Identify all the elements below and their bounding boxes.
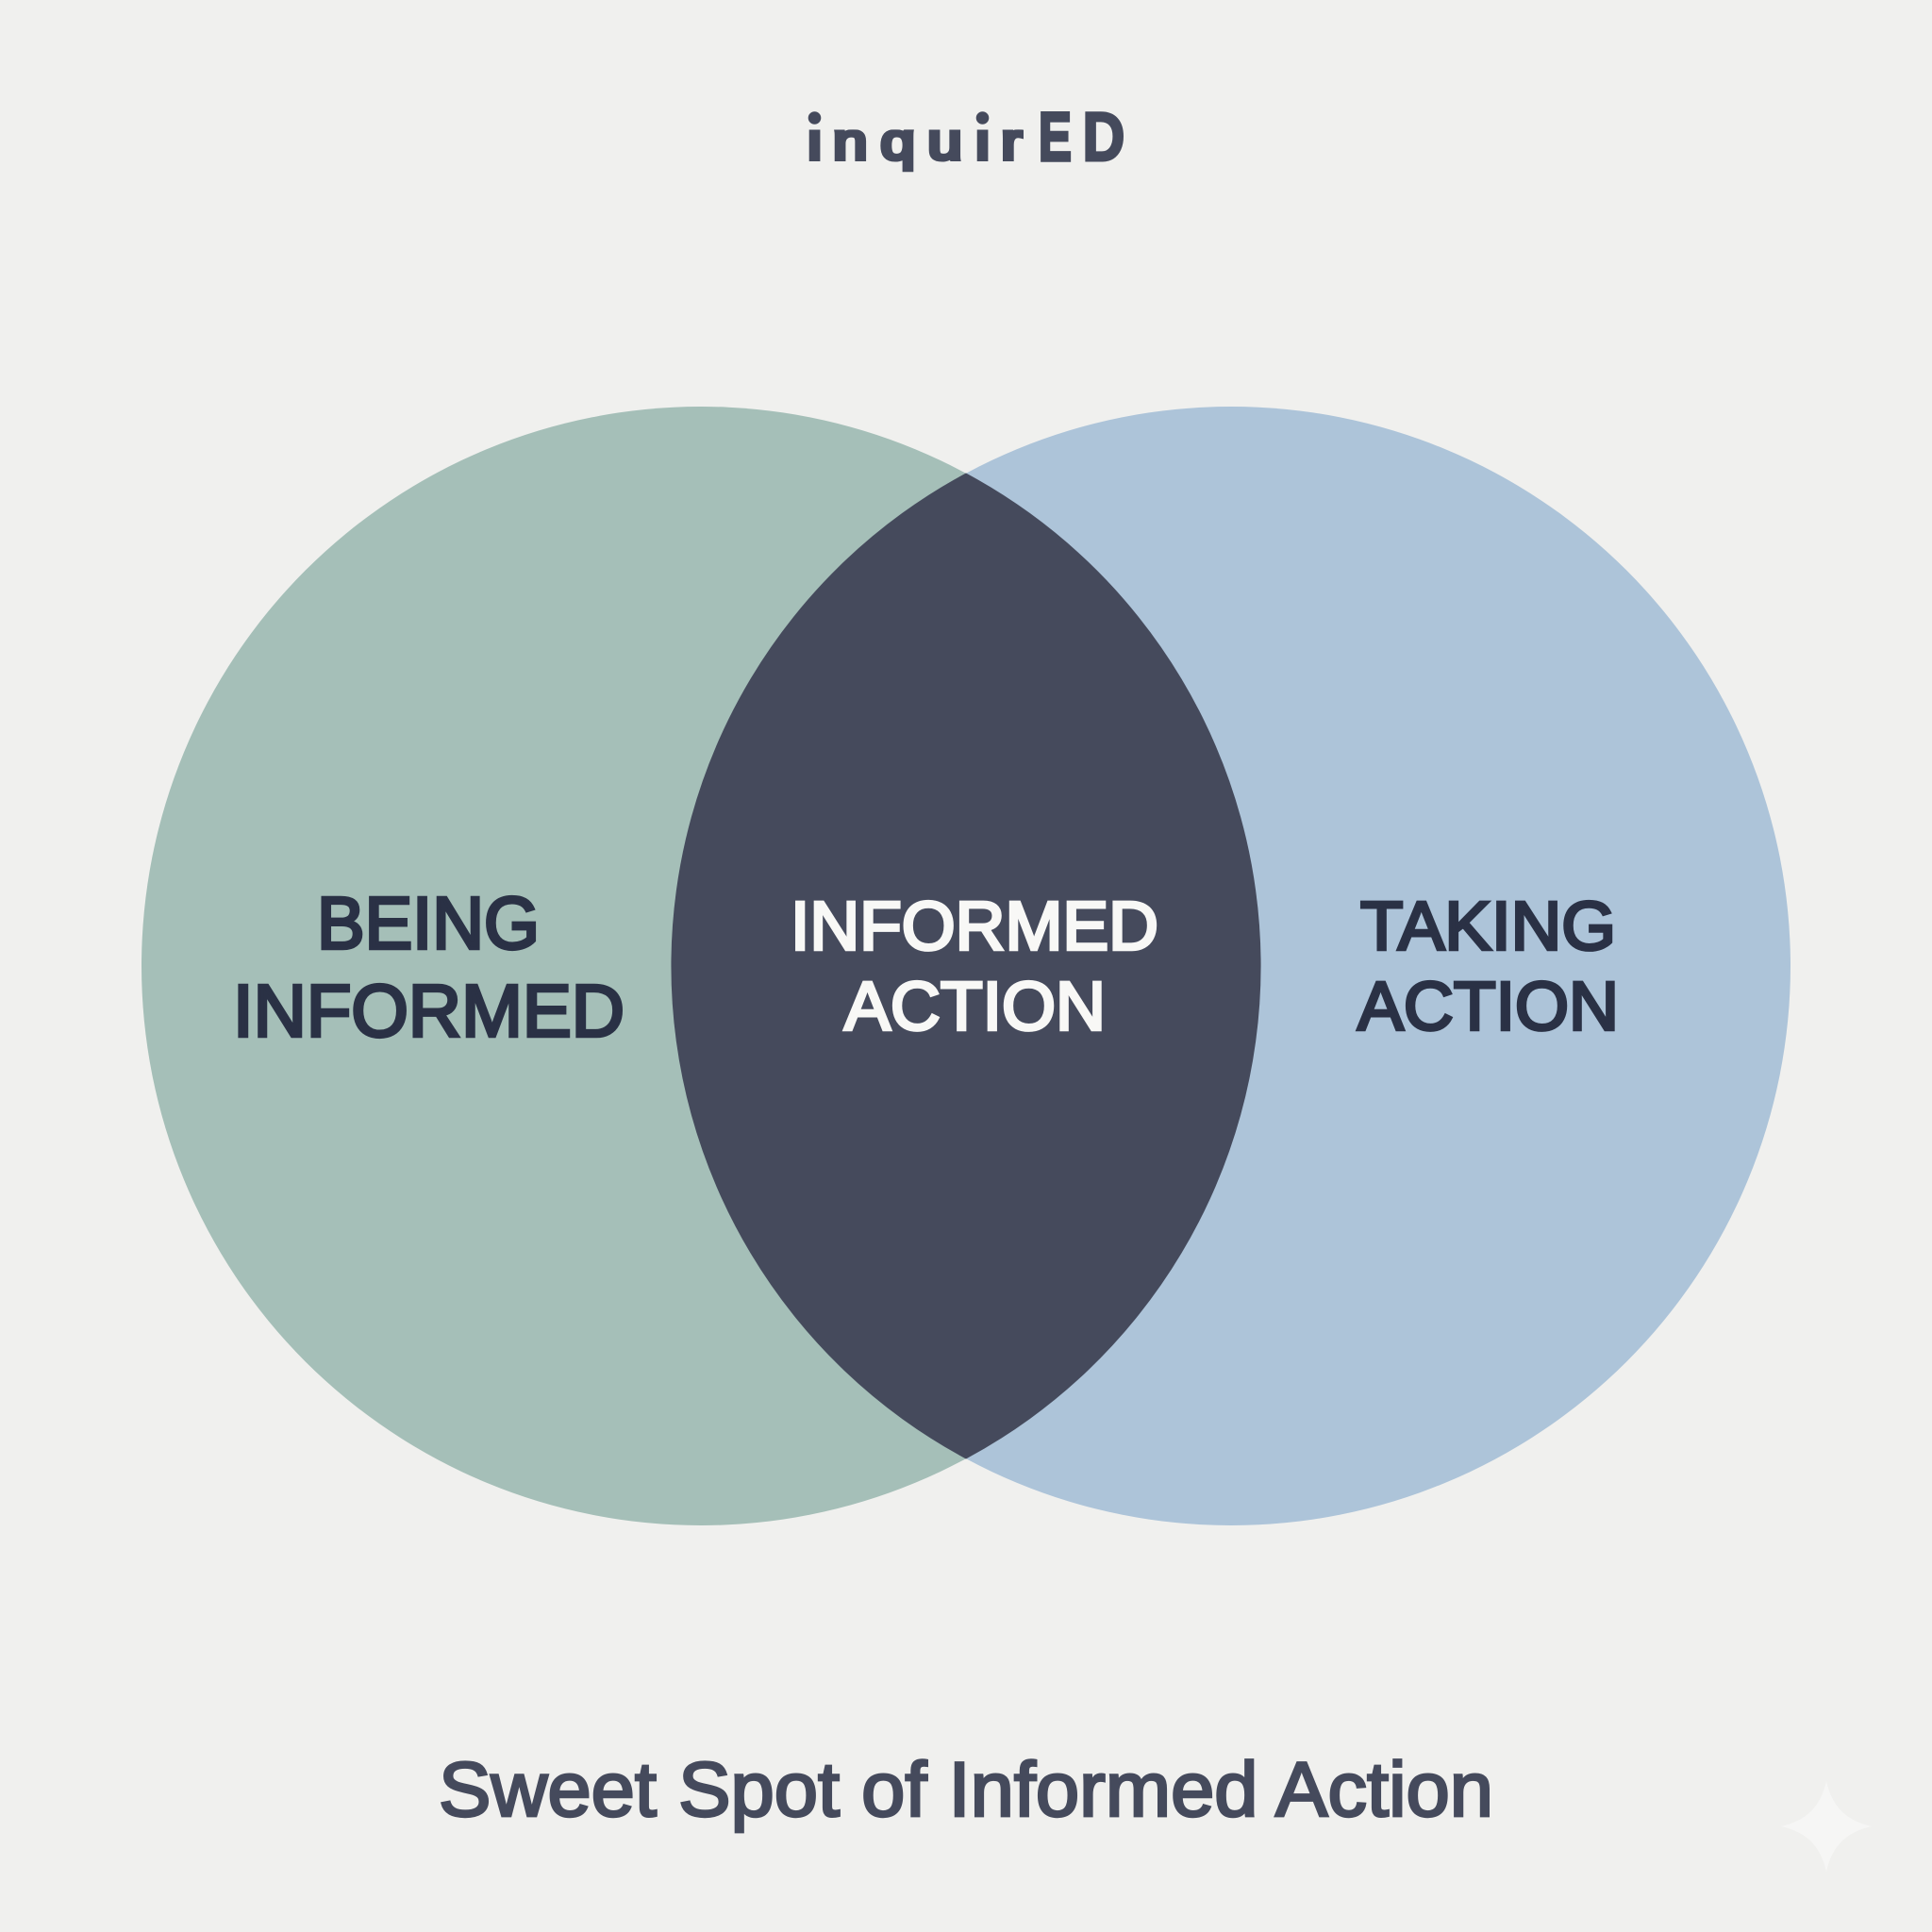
label: informed action: ACTION: [844, 968, 1106, 1045]
logo: inquirED: inquir: [808, 113, 1022, 170]
overlap: informed action: [671, 474, 1261, 1458]
label: taking action: [1357, 889, 1619, 1045]
logo: inquirED: E: [1039, 99, 1072, 175]
logo: inquirED: [808, 111, 1124, 172]
circle: being informed: [142, 407, 1260, 1525]
label: taking action: TAKING: [1360, 889, 1616, 964]
label: being informed: INFORMED: [233, 970, 625, 1053]
label: being informed: BEING: [317, 881, 540, 964]
venn diagram: [142, 407, 1790, 1525]
label: being informed: [233, 881, 625, 1053]
title: Sweet Spot of Informed Action: [439, 1747, 1493, 1833]
logo: inquirED: D: [1083, 99, 1124, 175]
icon: sparkle: [1781, 1781, 1872, 1872]
label: taking action: ACTION: [1357, 968, 1619, 1045]
circle: taking action: [672, 407, 1790, 1525]
label: informed action: INFORMED: [791, 889, 1158, 964]
label: informed action: [791, 889, 1158, 1045]
